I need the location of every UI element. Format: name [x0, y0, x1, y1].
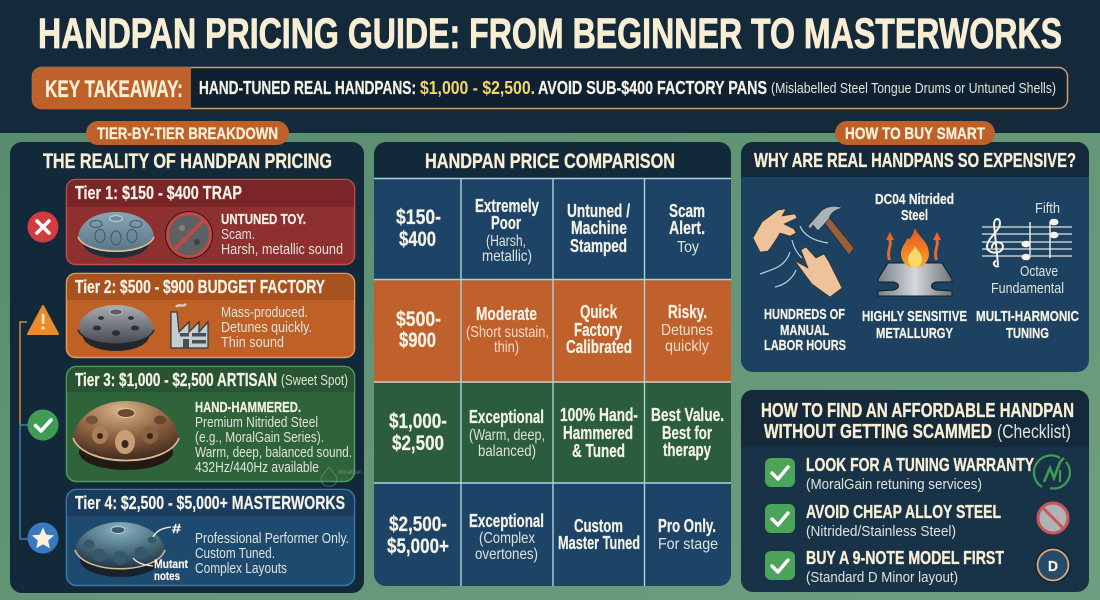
panel: price comparison table	[374, 142, 731, 586]
row: $2,500-$5,000+: (Complex	[479, 530, 535, 547]
tier 4 card: Tier 4: $2,500 - $5,000+ MASTERWORKS	[75, 493, 345, 513]
checklist item: tuning warranty: LOOK FOR A TUNING WARRANTY	[806, 455, 1034, 475]
row: $1,000-$2,500: $1,000-	[389, 410, 447, 433]
heading: how to find an affordable handpan: (Checklist)	[997, 422, 1071, 443]
row: $1,000-$2,500: balanced)	[478, 443, 536, 460]
row: $500-$900: Quick	[580, 302, 618, 322]
row: $1,000-$2,500: & Tuned	[572, 441, 625, 461]
row: $150-$400: Stamped	[570, 236, 627, 256]
icon: blue steel toy handpan	[78, 212, 154, 258]
callout: sharp note	[153, 521, 182, 537]
tier 2 description: Thin sound	[221, 334, 284, 351]
tier 2 card	[66, 274, 354, 358]
tier 2 description: Detunes quickly.	[221, 319, 312, 336]
checklist item: avoid cheap alloy steel: AVOID CHEAP ALLOY STEEL	[806, 502, 1001, 522]
callout: mutant notes	[133, 557, 188, 583]
text: highly sensitive metallurgy	[862, 308, 967, 342]
tier 1 description: UNTUNED TOY.	[221, 211, 306, 228]
row: $150-$400: Untuned /	[567, 201, 630, 221]
row: $1,000-$2,500: Hammered	[563, 423, 633, 443]
row: $500-$900: $500-	[396, 308, 441, 331]
icon: prohibited pan	[166, 212, 212, 258]
row: $2,500-$5,000+: $2,500-	[389, 513, 447, 536]
row: $1,000-$2,500	[389, 405, 724, 461]
pill: tier-by-tier breakdown: TIER-BY-TIER BREAKDOWN	[97, 124, 278, 143]
key takeaway bar: KEY TAKEAWAY:	[45, 76, 183, 103]
row: $150-$400	[396, 196, 705, 265]
pill: how to buy smart	[835, 121, 995, 145]
text: multi-harmonic tuning	[976, 308, 1079, 342]
panel: affordable handpan checklist	[741, 390, 1089, 592]
key takeaway bar: HAND-TUNED REAL HANDPANS:	[199, 78, 416, 98]
panel: tier breakdown	[10, 121, 364, 593]
checklist item: buy a 9-note model first: BUY A 9-NOTE MODEL FIRST	[806, 548, 1004, 568]
pill: how to buy smart: HOW TO BUY SMART	[845, 124, 985, 143]
row: $150-$400: metallic)	[482, 248, 532, 265]
tier 3 card: (Sweet Spot)	[281, 372, 348, 389]
key takeaway bar	[32, 67, 1068, 109]
tier 1 description	[221, 211, 343, 258]
row: $500-$900: Moderate	[476, 304, 537, 324]
tier 3 card	[66, 366, 362, 486]
pill: tier-by-tier breakdown	[86, 121, 289, 145]
tier 3 description: Premium Nitrided Steel	[195, 414, 318, 431]
icon: D compass	[1036, 548, 1070, 582]
row: $500-$900: thin)	[494, 339, 519, 356]
row: $500-$900: quickly	[665, 338, 709, 355]
checklist item: avoid cheap alloy steel	[765, 502, 1068, 540]
checklist item: tuning warranty	[765, 455, 1070, 493]
tier 2 description: Mass-produced.	[221, 304, 308, 321]
row: $2,500-$5,000+: overtones)	[475, 546, 538, 563]
tier 1 card	[66, 180, 354, 264]
tier 3 description: HAND-HAMMERED.	[195, 399, 301, 416]
tier 3 card: Tier 3: $1,000 - $2,500 ARTISAN	[75, 370, 277, 390]
tier 4 description: Custom Tuned.	[195, 545, 275, 562]
heading: handpan price comparison: HANDPAN PRICE COMPARISON	[425, 150, 675, 173]
header band	[0, 0, 1100, 133]
text: highly sensitive metallurgy: METALLURGY	[876, 325, 953, 342]
row: $500-$900: Calibrated	[566, 337, 632, 357]
icon: flame on anvil	[878, 228, 952, 296]
icon: musical staff: Octave	[1020, 263, 1058, 280]
icon: green check	[28, 410, 58, 440]
checklist item: buy a 9-note model first: (Standard D Minor layout)	[806, 569, 958, 586]
row: $2,500-$5,000+: Master Tuned	[558, 533, 640, 553]
row: $1,000-$2,500: (Warm, deep,	[469, 427, 545, 444]
grid lines	[374, 178, 731, 586]
row: $500-$900: $900	[399, 329, 436, 352]
row: $2,500-$5,000+: Exceptional	[469, 511, 544, 531]
row: $1,000-$2,500: Exceptional	[469, 407, 544, 427]
label: DC04 nitrided steel	[875, 191, 954, 224]
tier 4 description: Complex Layouts	[195, 560, 287, 577]
text: hundreds of manual labor hours: LABOR HOURS	[764, 337, 846, 354]
row backgrounds	[374, 179, 731, 280]
tier 1 card: Tier 1: $150 - $400 TRAP	[75, 183, 242, 203]
row: $150-$400: Poor	[491, 213, 521, 233]
timeline connector	[20, 322, 27, 425]
row: $150-$400: (Harsh,	[486, 233, 526, 250]
icon: teal masterwork handpan	[75, 522, 165, 577]
icon: warning triangle	[28, 306, 58, 334]
icon: musical staff: Fifth	[1035, 200, 1060, 217]
panel: why are real handpans so expensive	[741, 121, 1089, 372]
row: $2,500-$5,000+: $5,000+	[387, 535, 449, 558]
tier 4 description	[195, 530, 349, 577]
tier 1 description: Harsh, metallic sound	[221, 241, 343, 258]
heading: how to find an affordable handpan	[761, 400, 1074, 443]
heading: how to find an affordable handpan: WITHOUT GETTING SCAMMED	[764, 421, 992, 443]
tier 4 description: Professional Performer Only.	[195, 530, 349, 547]
icon: no steel	[1038, 503, 1068, 533]
icon: musical staff	[982, 200, 1072, 297]
text: hundreds of manual labor hours	[764, 306, 846, 354]
tier 2 description	[221, 304, 312, 351]
icon: grey factory handpan	[78, 305, 154, 351]
text: hundreds of manual labor hours: HUNDREDS OF	[764, 306, 845, 323]
tier 1 description: Scam.	[221, 226, 255, 243]
row: $1,000-$2,500: Best for	[662, 423, 712, 443]
icon: D compass: D	[1048, 558, 1058, 575]
text: highly sensitive metallurgy: HIGHLY SENSITIVE	[862, 308, 967, 325]
row: $500-$900: Detunes	[661, 322, 713, 339]
row: $1,000-$2,500: therapy	[663, 440, 711, 460]
text: multi-harmonic tuning: TUNING	[1006, 325, 1049, 342]
tier 3 description	[195, 399, 352, 476]
callout: mutant notes: Mutant	[154, 557, 188, 571]
row: $150-$400: Toy	[677, 239, 699, 256]
icon: hands and hammer	[753, 206, 854, 297]
icon: blue star	[28, 522, 58, 554]
row: $2,500-$5,000+: For stage	[658, 536, 718, 553]
row: $2,500-$5,000+: Pro Only.	[658, 516, 716, 536]
row: $500-$900: Risky.	[668, 302, 707, 322]
icon: bronze artisan handpan	[73, 401, 179, 470]
row: $150-$400: Extremely	[475, 196, 539, 216]
icon: wrench warranty	[1034, 455, 1070, 488]
row: $150-$400: Machine	[571, 218, 627, 238]
row: $1,000-$2,500: $2,500	[392, 432, 444, 455]
icon: musical staff: Fundamental	[991, 280, 1064, 297]
icon: factory	[171, 304, 208, 348]
row: $500-$900: (Short sustain,	[466, 324, 549, 341]
row: $150-$400: $400	[399, 228, 436, 251]
row: $1,000-$2,500: 100% Hand-	[560, 405, 638, 425]
label: DC04 nitrided steel: DC04 Nitrided	[875, 191, 954, 208]
checklist item: avoid cheap alloy steel: (Nitrided/Stainless Steel)	[806, 523, 956, 540]
row: $150-$400: Alert.	[669, 218, 705, 238]
watermark	[321, 467, 362, 486]
callout: mutant notes: notes	[154, 569, 180, 583]
row: $150-$400: $150-	[396, 206, 441, 229]
icon: red cross	[28, 212, 58, 242]
heading: reality of handpan pricing: THE REALITY OF HANDPAN PRICING	[43, 150, 332, 173]
text: hundreds of manual labor hours: MANUAL	[780, 322, 829, 339]
row: $500-$900	[396, 302, 713, 357]
callout: sharp note: #	[172, 521, 182, 536]
tier 4 card	[66, 490, 354, 586]
row: $2,500-$5,000+: Custom	[574, 516, 623, 536]
row: $500-$900: Factory	[574, 320, 622, 340]
checklist item: buy a 9-note model first	[765, 548, 1070, 586]
tier 3 description: 432Hz/440Hz available	[195, 459, 319, 476]
key takeaway bar: AVOID SUB-$400 FACTORY PANS	[538, 78, 767, 98]
label: DC04 nitrided steel: Steel	[901, 207, 928, 224]
row: $1,000-$2,500: Best Value.	[651, 405, 724, 425]
row: $2,500-$5,000+	[387, 511, 718, 563]
tier 3 description: Warm, deep, balanced sound.	[195, 444, 352, 461]
tier 2 card: Tier 2: $500 - $900 BUDGET FACTORY	[75, 277, 325, 297]
checklist item: tuning warranty: (MoralGain retuning services)	[806, 476, 982, 493]
row: $150-$400: Scam	[669, 201, 705, 221]
key takeaway bar: $1,000 - $2,500.	[420, 78, 535, 98]
watermark: MoralGain	[338, 470, 362, 476]
tier 3 description: (e.g., MoralGain Series).	[195, 429, 324, 446]
